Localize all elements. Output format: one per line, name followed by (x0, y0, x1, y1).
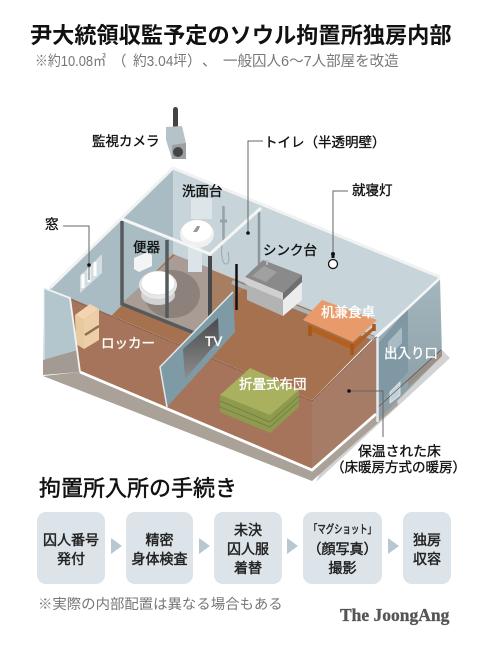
sink counter (245, 260, 302, 316)
label: desk: 机兼食卓 (321, 305, 375, 320)
flow: admission steps (37, 512, 451, 584)
left wall (43, 168, 173, 375)
subtitle: 一般囚人6〜7人部屋を改造 (223, 53, 399, 70)
wash basin (180, 198, 214, 272)
building base (43, 350, 450, 482)
step 5: 収容 (413, 551, 441, 567)
leader: night light (333, 191, 348, 256)
label: heated floor: 保温された床 (358, 444, 441, 459)
toilet (134, 252, 177, 305)
locker (75, 304, 99, 349)
step 1: 囚人番号 (43, 532, 99, 548)
icon: night light bulb (328, 252, 338, 268)
subtitle: ） (187, 53, 202, 70)
step 3: 着替 (234, 560, 262, 576)
label: entrance: 出入り口 (384, 346, 438, 361)
label: locker: ロッカー (101, 336, 155, 351)
shower (220, 206, 229, 264)
leader: window (63, 226, 91, 280)
logo: The JoongAng: The JoongAng (340, 605, 450, 625)
TV partition wall (160, 292, 235, 407)
label: washstand: 洗面台 (182, 184, 222, 199)
step 2: 身体検査 (132, 551, 188, 567)
arrow 3 (287, 538, 298, 554)
step 5: 独房 (413, 532, 441, 548)
arrow 2 (199, 538, 210, 554)
step 5 (403, 512, 451, 584)
subtitle: ※約10.08㎡ (35, 53, 106, 70)
label: toilet bowl: 便器 (133, 240, 160, 255)
label: night light: 就寝灯 (352, 183, 392, 198)
subtitle: （ (112, 53, 126, 70)
step 3: 未決 (234, 522, 262, 538)
label: camera: 監視カメラ (92, 134, 160, 149)
toilet rug (144, 270, 200, 318)
subtitle: 、 (202, 54, 216, 70)
floor (70, 254, 377, 470)
label: sink: シンク台 (263, 243, 317, 258)
TV screen (183, 318, 219, 379)
desk (303, 300, 377, 355)
label: window: 窓 (45, 217, 58, 232)
section heading: procedure: 拘置所入所の手続き (39, 476, 237, 501)
arrow 1 (111, 538, 122, 554)
window (80, 254, 102, 293)
label: TV: TV (205, 334, 222, 349)
step 4: 「マグショット」 (309, 522, 376, 536)
label: heated floor: （床暖房方式の暖房） (331, 460, 466, 475)
toilet glass partition (122, 208, 261, 334)
arrow 4 (388, 538, 399, 554)
toilet room floor (122, 255, 210, 332)
step 3: 囚人服 (227, 541, 269, 557)
step 2: 精密 (146, 532, 174, 548)
footnote: ※実際の内部配置は異なる場合もある (38, 596, 283, 613)
icon: CCTV camera (166, 107, 186, 159)
step 4: 撮影 (328, 560, 356, 576)
step 3 (214, 512, 282, 584)
folded futon (220, 368, 299, 433)
room illustration (43, 168, 450, 482)
leader: toilet wall (246, 141, 263, 235)
front translucent wall edge (80, 372, 376, 470)
step 4: （顔写真） (308, 541, 378, 557)
title: 尹大統領収監予定のソウル拘置所独房内部 (30, 23, 452, 48)
label: heated floor (331, 444, 466, 475)
label: toilet wall: トイレ（半透明壁） (264, 135, 386, 150)
step 1: 発付 (57, 551, 85, 567)
right translucent wall with door (377, 278, 442, 422)
left front panel (43, 288, 80, 375)
step 2 (126, 512, 193, 584)
wall top edges (50, 168, 440, 288)
label: futon: 折畳式布団 (239, 377, 306, 392)
step 4 (303, 512, 382, 584)
step 1 (37, 512, 105, 584)
subtitle: 約3.04坪 (133, 53, 187, 70)
back wall (173, 168, 440, 336)
leader: heated floor (347, 389, 383, 437)
